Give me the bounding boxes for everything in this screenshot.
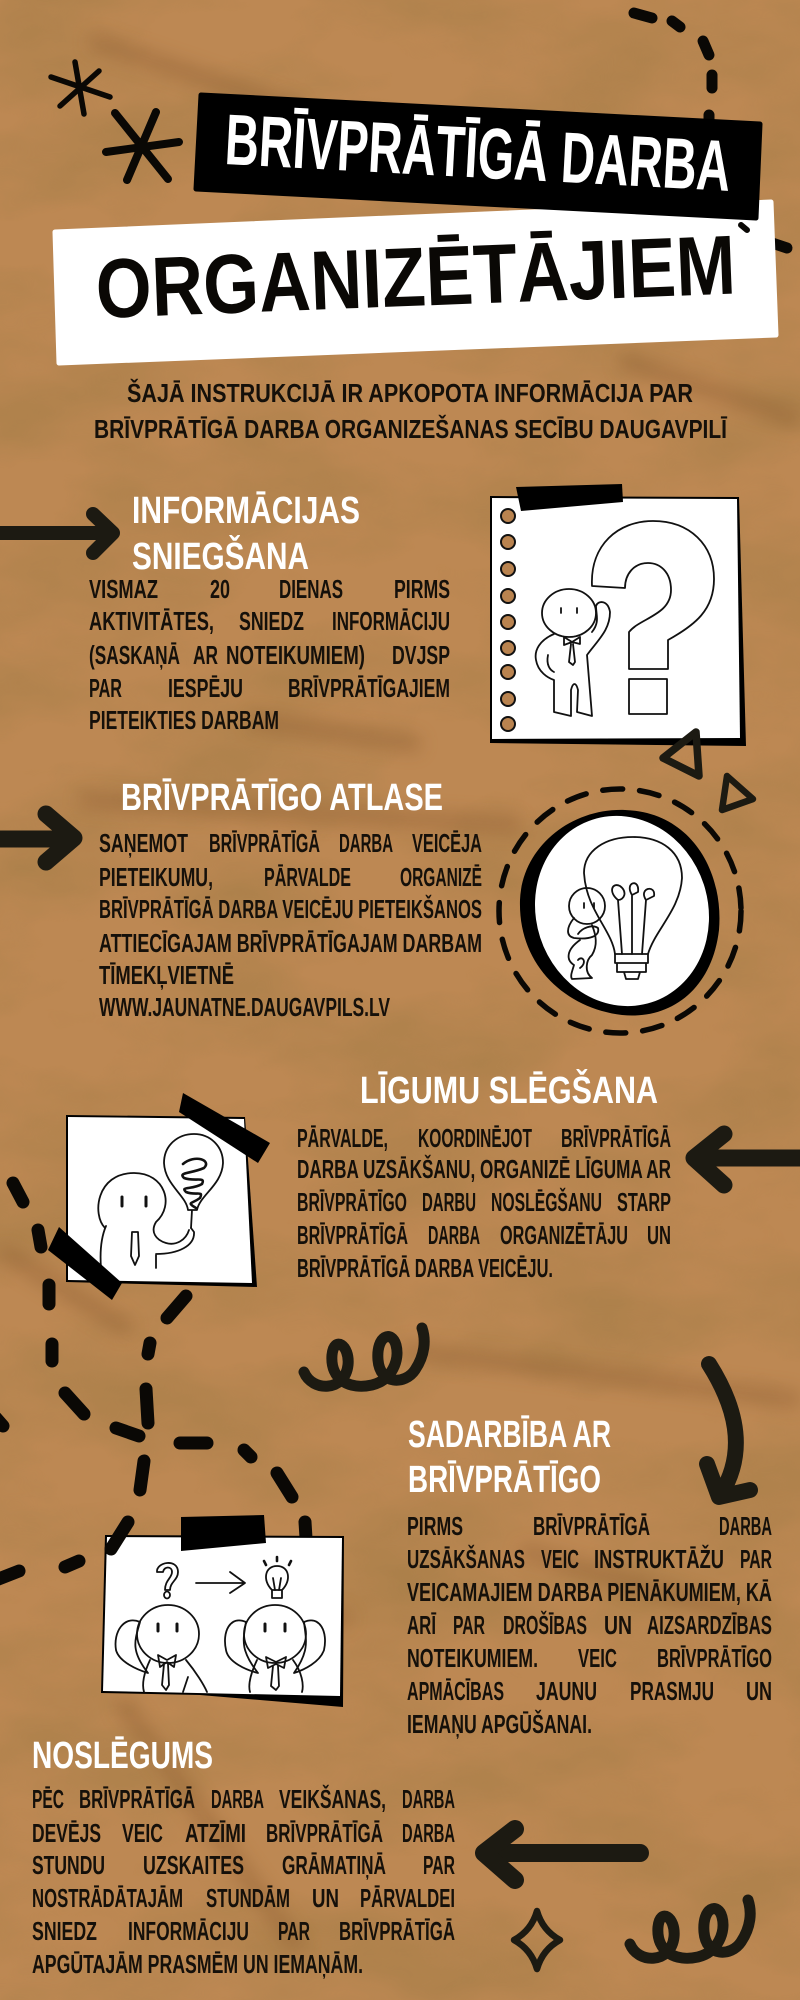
icon: small question mark (157, 1563, 178, 1590)
icon: thin arrow (196, 1572, 245, 1593)
text block: informācijas sniegšana: PIRMS (394, 574, 450, 604)
panel: card with question to idea (101, 1515, 344, 1707)
text block: līgumu slēgšana: KOORDINĒJOT (418, 1123, 532, 1153)
text block: brīvprātīgo atlase: DARBA (339, 828, 393, 858)
text block: informācijas sniegšana: (SASKAŅĀ (89, 640, 180, 670)
text block: līgumu slēgšana: PĀRVALDE, (297, 1123, 388, 1153)
heading: noslēgums: NOSLĒGUMS (32, 1735, 213, 1777)
text block: informācijas sniegšana: AKTIVITĀTES, (89, 606, 214, 636)
icon: right person (225, 1605, 325, 1692)
heading: sadarbība ar brīvprātīgo: BRĪVPRĀTĪGO (408, 1459, 601, 1501)
text block: noslēgums: UZSKAITES (143, 1850, 244, 1880)
text block: sadarbība ar brīvprātīgo: UN (604, 1610, 632, 1640)
text block: līgumu slēgšana: UN (647, 1220, 671, 1250)
text block: brīvprātīgo atlase: ATTIECĪGAJAM BRĪVPRĀTĪGAJAM DARBAM (99, 928, 482, 958)
title: black banner (196, 95, 760, 218)
text block: noslēgums: UN (312, 1883, 339, 1913)
heading: sadarbība ar brīvprātīgo (408, 1414, 611, 1501)
text block: informācijas sniegšana: IESPĒJU (168, 673, 243, 703)
icon: squiggle (304, 1328, 424, 1386)
notebook holes (501, 509, 515, 731)
text block: sadarbība ar brīvprātīgo: BRĪVPRĀTĪGĀ (533, 1511, 650, 1541)
dashed line: top right (634, 13, 787, 248)
icon: triangle small (722, 776, 753, 810)
text block: līgumu slēgšana: BRĪVPRĀTĪGĀ (297, 1220, 408, 1250)
text block: informācijas sniegšana: PIETEIKTIES DARBAM (89, 705, 279, 735)
text block: informācijas sniegšana: NOTEIKUMIEM) (226, 640, 365, 670)
text block: brīvprātīgo atlase: PIETEIKUMU, (99, 862, 213, 892)
icon: small question dot (164, 1592, 170, 1598)
text block: sadarbība ar brīvprātīgo: NOTEIKUMIEM. (407, 1643, 538, 1673)
text block: brīvprātīgo atlase: WWW.JAUNATNE.DAUGAVPILS.LV (99, 992, 390, 1022)
text block: noslēgums: INFORMĀCIJU (128, 1916, 249, 1946)
text block: noslēgums: DARBA (402, 1818, 455, 1848)
text block: noslēgums: ATZĪMI (185, 1818, 246, 1848)
text block: informācijas sniegšana: SNIEDZ (239, 606, 304, 636)
text block: noslēgums: STUNDU (32, 1850, 105, 1880)
text block: brīvprātīgo atlase: BRĪVPRĀTĪGĀ DARBA VEICĒJU PIETEIKŠANOS (99, 894, 482, 924)
text block: sadarbība ar brīvprātīgo: PAR (740, 1544, 772, 1574)
text block: noslēgums: PĒC (32, 1784, 64, 1814)
text block: noslēgums: SNIEDZ (32, 1916, 97, 1946)
text block: sadarbība ar brīvprātīgo: UN (746, 1676, 772, 1706)
text block: informācijas sniegšana: INFORMĀCIJU (332, 606, 450, 636)
text block: noslēgums: PAR (278, 1916, 310, 1946)
heading: līgumu slēgšana: LĪGUMU SLĒGŠANA (360, 1067, 658, 1112)
text block: līgumu slēgšana: STARP (617, 1187, 671, 1217)
text block: noslēgums: STUNDĀM (206, 1883, 290, 1913)
text block: noslēgums: BRĪVPRĀTĪGĀ (266, 1818, 383, 1848)
icon: question mark (592, 521, 714, 714)
text block: noslēgums: DEVĒJS (32, 1818, 101, 1848)
text block: līgumu slēgšana: ORGANIZĒTĀJU (500, 1220, 628, 1250)
text block: sadarbība ar brīvprātīgo: INSTRUKTĀŽU (594, 1544, 724, 1574)
text block: brīvprātīgo atlase (99, 828, 482, 1022)
text block: līgumu slēgšana: DARBU (422, 1187, 476, 1217)
text block: sadarbība ar brīvprātīgo: VEIC (578, 1643, 617, 1673)
text block: informācijas sniegšana: DIENAS (279, 574, 343, 604)
dash on white banner (741, 225, 747, 230)
intro text (94, 378, 728, 444)
text block: noslēgums: APGŪTAJĀM PRASMĒM UN IEMAŅĀM. (32, 1949, 363, 1979)
text block: informācijas sniegšana: BRĪVPRĀTĪGAJIEM (288, 673, 450, 703)
icon: person (568, 888, 605, 979)
text block: līgumu slēgšana: DARBA (428, 1220, 480, 1250)
title: white banner (55, 202, 776, 363)
icon: left person (116, 1605, 207, 1692)
text block: brīvprātīgo atlase: VEICĒJA (412, 828, 482, 858)
heading: informācijas sniegšana: SNIEGŠANA (132, 533, 309, 578)
intro text: ŠAJĀ INSTRUKCIJĀ IR APKOPOTA INFORMĀCIJA PAR (127, 378, 693, 408)
text block: noslēgums: BRĪVPRĀTĪGĀ (79, 1784, 195, 1814)
text block: noslēgums (32, 1784, 455, 1979)
panel: card with balloon bulb (48, 1093, 270, 1300)
text block: informācijas sniegšana: AR (193, 640, 218, 670)
text block: noslēgums: VEIKŠANAS, (279, 1784, 386, 1814)
text block: informācijas sniegšana: PAR (89, 673, 122, 703)
icon: thinking person (536, 589, 610, 716)
text block: brīvprātīgo atlase: TĪMEKĻVIETNĒ (99, 960, 234, 990)
text block: līgumu slēgšana: BRĪVPRĀTĪGĀ DARBA VEICĒJU. (297, 1253, 553, 1283)
text block: noslēgums: GRĀMATIŅĀ (282, 1850, 386, 1880)
tape (48, 1227, 122, 1300)
arrow: curved down (707, 1364, 750, 1497)
text block: līgumu slēgšana: NOSLĒGŠANU (491, 1187, 602, 1217)
text block: noslēgums: BRĪVPRĀTĪGĀ (339, 1916, 455, 1946)
black blob (520, 810, 719, 1016)
text block: noslēgums: VEIC (122, 1818, 163, 1848)
text block: sadarbība ar brīvprātīgo: APMĀCĪBAS (407, 1676, 504, 1706)
heading: informācijas sniegšana: INFORMĀCIJAS (132, 490, 360, 532)
text block: informācijas sniegšana: 20 (210, 574, 230, 604)
text block: noslēgums: DARBA (402, 1784, 455, 1814)
text block: informācijas sniegšana: DVJSP (392, 640, 450, 670)
text block: sadarbība ar brīvprātīgo: UZSĀKŠANAS (407, 1544, 525, 1574)
arrow: section 2 (0, 814, 74, 862)
tape (179, 1093, 270, 1163)
panel: circle with person and light bulb (499, 789, 741, 1033)
text block: sadarbība ar brīvprātīgo: JAUNU (536, 1676, 597, 1706)
heading: sadarbība ar brīvprātīgo: SADARBĪBA AR (408, 1414, 611, 1456)
arrow: section 5 (484, 1829, 640, 1880)
heading: brīvprātīgo atlase: BRĪVPRĀTĪGO ATLASE (121, 777, 443, 819)
text block: sadarbība ar brīvprātīgo: PIRMS (407, 1511, 463, 1541)
text block: noslēgums: NOSTRĀDĀTAJĀM (32, 1883, 183, 1913)
text block: informācijas sniegšana (89, 574, 450, 735)
text block: līgumu slēgšana: BRĪVPRĀTĪGĀ (561, 1123, 671, 1153)
text block: brīvprātīgo atlase: ORGANIZĒ (400, 862, 482, 892)
text block: sadarbība ar brīvprātīgo: VEIC (541, 1544, 579, 1574)
icon: bulb (584, 837, 682, 979)
text block: noslēgums: PAR (423, 1850, 455, 1880)
text block: sadarbība ar brīvprātīgo (407, 1511, 772, 1739)
panel: notebook card with question mark (490, 484, 746, 746)
icon: squiggle bottom (630, 1900, 750, 1958)
text block: noslēgums: PĀRVALDEI (360, 1883, 455, 1913)
text block: sadarbība ar brīvprātīgo: ARĪ (407, 1610, 436, 1640)
icon: small asterisk (51, 62, 110, 114)
tape (516, 484, 623, 511)
text block: līgumu slēgšana: BRĪVPRĀTĪGO (297, 1187, 407, 1217)
icon: person with bulb balloon (98, 1134, 223, 1268)
heading: informācijas sniegšana (132, 490, 360, 578)
dashed ring (499, 789, 741, 1033)
icon: large asterisk (106, 112, 179, 180)
text block: brīvprātīgo atlase: SAŅEMOT (99, 828, 188, 858)
text block: brīvprātīgo atlase: BRĪVPRĀTĪGĀ (209, 828, 320, 858)
text block: noslēgums: DARBA (211, 1784, 264, 1814)
arrow: section 3 (694, 1134, 800, 1185)
text block: informācijas sniegšana: VISMAZ (89, 574, 158, 604)
white circle (511, 793, 733, 1029)
text block: brīvprātīgo atlase: PĀRVALDE (264, 862, 351, 892)
icon: small bulb (264, 1557, 291, 1598)
text block: sadarbība ar brīvprātīgo: DROŠĪBAS (503, 1610, 587, 1640)
text block: sadarbība ar brīvprātīgo: PAR (453, 1610, 485, 1640)
text block: līgumu slēgšana (297, 1123, 671, 1283)
icon: diamond sparkle (514, 1911, 560, 1969)
icon: triangle (663, 732, 699, 776)
tape (181, 1515, 266, 1551)
dash overlapping card (111, 1522, 128, 1549)
dashed path: left network (0, 1183, 306, 1580)
text block: sadarbība ar brīvprātīgo: PRASMJU (630, 1676, 714, 1706)
text block: sadarbība ar brīvprātīgo: IEMAŅU APGŪŠANAI. (407, 1709, 592, 1739)
arrow: section 1 (0, 514, 113, 553)
